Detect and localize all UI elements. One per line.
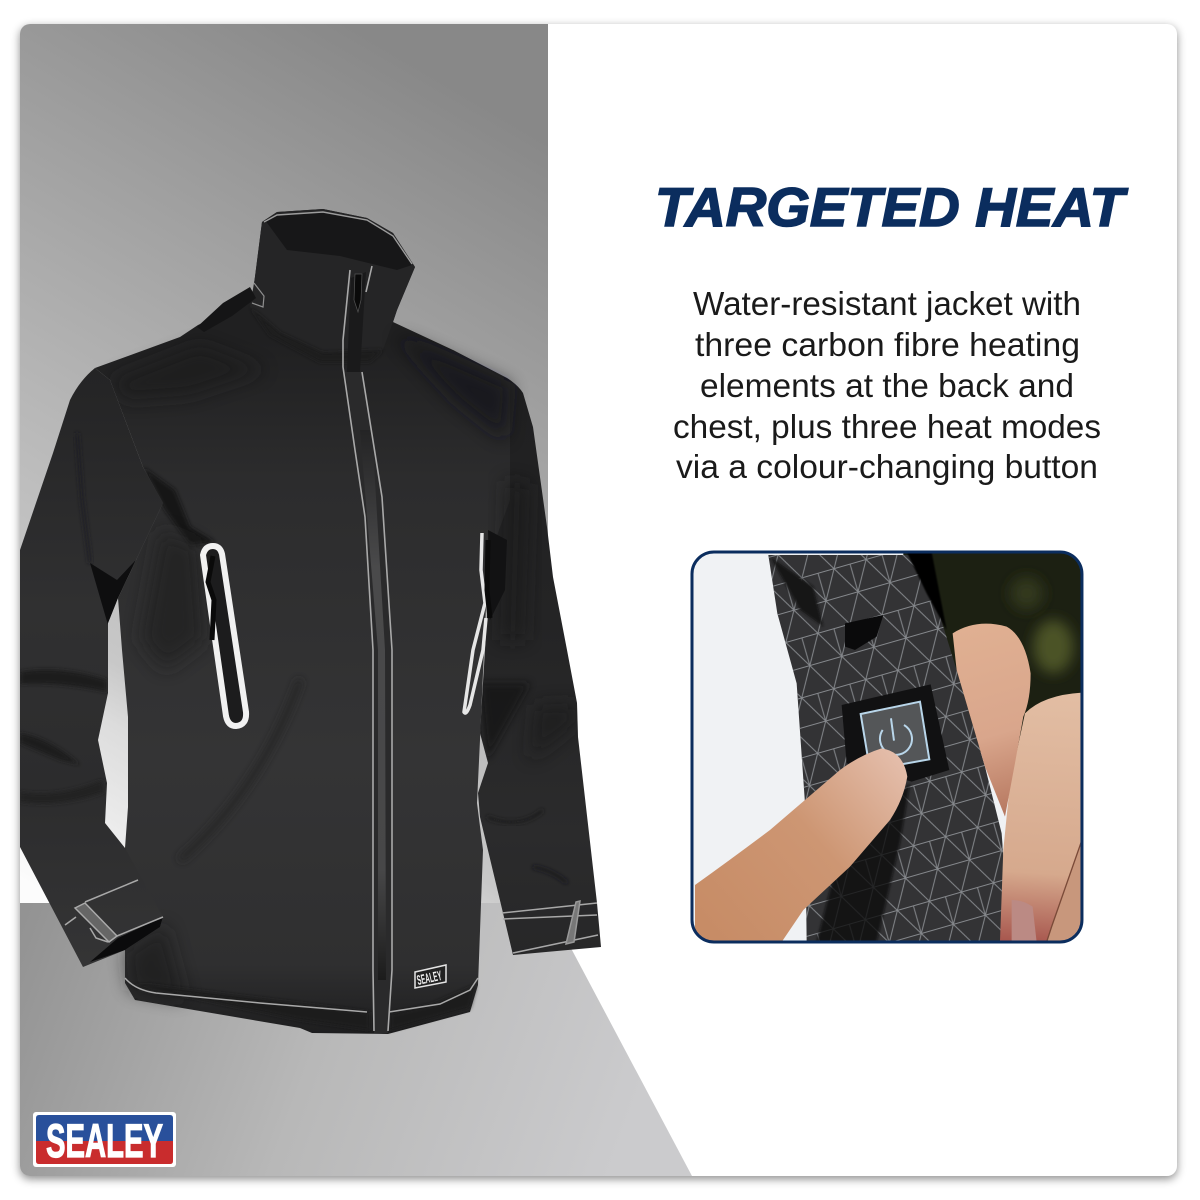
- collar tab stitching: [252, 283, 264, 307]
- description text: chest, plus three heat modes: [673, 408, 1101, 445]
- collar drawcord: [197, 287, 256, 332]
- right sleeve folds: [480, 480, 577, 883]
- right cuff stitching and tab: [502, 901, 598, 953]
- zip highlight strip: [364, 481, 386, 980]
- fingernail: [1012, 900, 1037, 942]
- description text: three carbon fibre heating: [695, 326, 1080, 363]
- ring finger: [1000, 693, 1082, 942]
- pocket recess: [488, 530, 507, 620]
- left sleeve folds: [20, 433, 163, 962]
- hem stitching: [125, 978, 478, 1012]
- fabric: [768, 555, 1010, 942]
- photo frame: [692, 552, 1082, 942]
- jacket photo: [20, 209, 601, 1034]
- collar: [250, 209, 415, 362]
- jacket right sleeve: [453, 350, 601, 955]
- description text: elements at the back and: [700, 367, 1074, 404]
- studio floor: [20, 903, 692, 1176]
- left image panel: [20, 24, 692, 1176]
- heat control button: [842, 684, 949, 782]
- title: TARGETED HEAT: [655, 176, 1128, 238]
- jacket fold shading: [110, 335, 510, 1030]
- zip pull: [354, 274, 362, 312]
- description text: [673, 285, 1101, 485]
- photo inset: power button: [692, 552, 1083, 942]
- white shirt: [694, 554, 1008, 940]
- fabric shadows: [770, 552, 947, 942]
- jacket left sleeve: [20, 368, 163, 967]
- right chest pocket: [464, 533, 490, 713]
- collar stitching: [264, 212, 412, 264]
- middle finger: [953, 624, 1031, 817]
- brand logo: SEALEY: [46, 1114, 163, 1167]
- jacket brand tag: SEALEY: [415, 968, 443, 988]
- left cuff stitching and tab: [65, 880, 163, 942]
- centre zip placket: [374, 689, 391, 1033]
- jacket brand tag: [415, 965, 446, 988]
- foliage background: [903, 552, 1083, 752]
- brand logo: [33, 1112, 176, 1167]
- index finger: [695, 748, 907, 942]
- little finger: [1047, 840, 1082, 942]
- fabric pattern: [768, 555, 1010, 942]
- description text: Water-resistant jacket with: [693, 285, 1081, 322]
- left chest pocket: [203, 546, 246, 726]
- description text: via a colour-changing button: [676, 448, 1098, 485]
- zip stitching: [343, 266, 392, 1031]
- jacket body: [95, 209, 510, 1034]
